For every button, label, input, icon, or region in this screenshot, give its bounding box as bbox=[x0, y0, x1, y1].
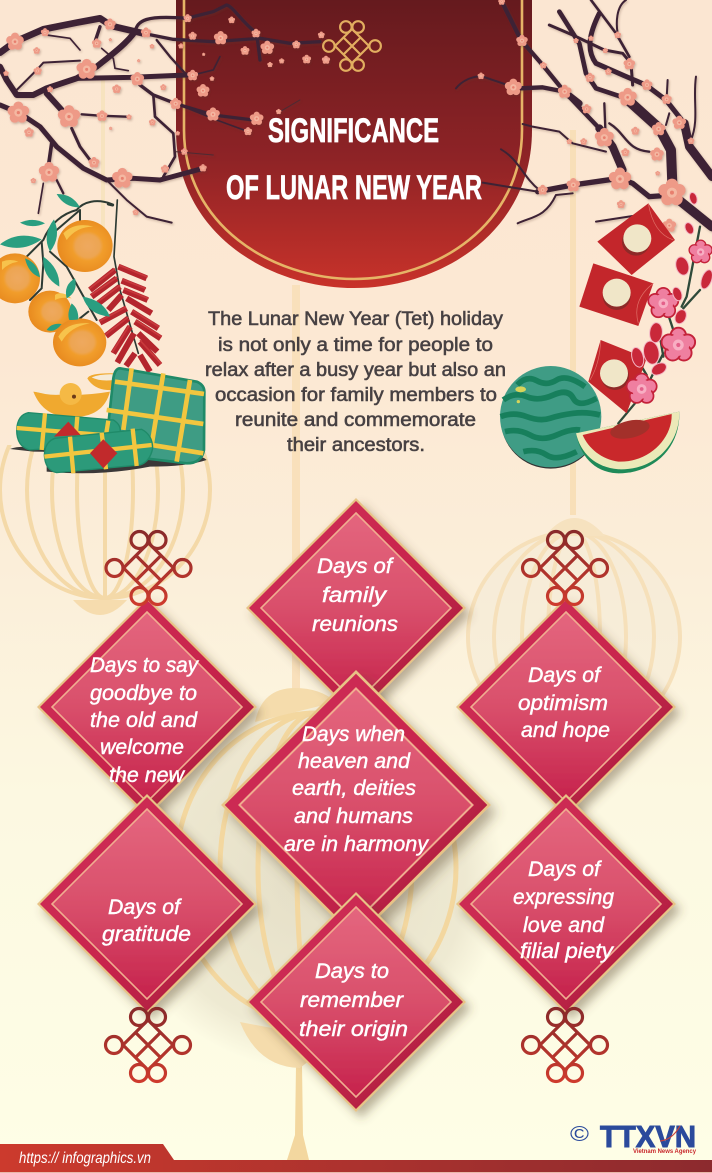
diamond: days to say goodbye: welcome bbox=[100, 735, 184, 759]
diamond: heaven, earth, deities and humans: earth, deities bbox=[292, 776, 416, 800]
diamond: heaven, earth, deities and humans: heaven and bbox=[298, 749, 411, 773]
icon: blossom buds bbox=[630, 192, 712, 378]
icon: red knots bbox=[106, 532, 608, 1082]
diamond: days of gratitude: gratitude bbox=[102, 922, 191, 946]
diamond: heaven, earth, deities and humans: Days when bbox=[302, 722, 405, 746]
diamond: days to say goodbye: the new bbox=[109, 763, 185, 787]
diamond: days to say goodbye bbox=[37, 597, 257, 817]
diamond: days of love and filial piety bbox=[456, 794, 676, 1014]
illustration: red envelopes, peach blossom and watermelon bbox=[500, 192, 712, 473]
diamond: heaven, earth, deities and humans: are in harmony bbox=[284, 832, 429, 856]
diamond: days of love and filial piety: love and bbox=[523, 913, 605, 937]
lantern: centre bbox=[115, 688, 505, 1070]
diamond: days to remember their origin: their origin bbox=[299, 1017, 408, 1041]
icon: red envelopes bbox=[579, 203, 675, 413]
diamond: days of optimism and hope: and hope bbox=[521, 718, 610, 742]
plum branch: right bbox=[456, 0, 712, 232]
icon: gold knot bbox=[323, 21, 381, 71]
diamond: days to say goodbye: Days to say bbox=[90, 653, 199, 677]
diamond: days to say goodbye: goodbye to bbox=[90, 681, 197, 705]
lantern: right bbox=[468, 518, 680, 742]
title banner bbox=[176, 0, 532, 288]
plum branch: left bbox=[0, 5, 330, 223]
intro text: occasion for family members to bbox=[215, 385, 497, 406]
diamond: days to remember their origin: Days to bbox=[315, 959, 389, 983]
intro text: is not only a time for people to bbox=[218, 335, 493, 356]
diamond: days of optimism and hope: Days of bbox=[528, 663, 602, 687]
diamond: days of optimism and hope bbox=[456, 597, 676, 817]
icon: peach blossoms bbox=[627, 240, 712, 403]
diamond: heaven, earth, deities and humans: and humans bbox=[294, 804, 413, 828]
lantern: left bbox=[0, 445, 212, 615]
icon: watermelon bbox=[500, 366, 601, 469]
diamond: days of family reunions bbox=[246, 498, 466, 718]
diamond: days of gratitude: Days of bbox=[108, 895, 182, 919]
intro text: their ancestors. bbox=[287, 435, 425, 456]
intro text bbox=[205, 309, 506, 456]
intro text: relax after a busy year but also an bbox=[205, 360, 506, 381]
icon: blossom stems bbox=[618, 227, 700, 423]
illustration: oranges, firecrackers and sticky rice cakes bbox=[0, 194, 207, 473]
diamond: days to say goodbye: the old and bbox=[90, 708, 198, 732]
diamond: days of love and filial piety: expressing bbox=[513, 885, 614, 909]
diamond: days to remember their origin bbox=[246, 892, 466, 1112]
diamond: days of gratitude bbox=[37, 794, 257, 1014]
footer bar bbox=[0, 1144, 712, 1173]
intro text: The Lunar New Year (Tet) holiday bbox=[208, 309, 504, 330]
logo: TTXVN: TTXVN bbox=[600, 1119, 696, 1154]
title bbox=[226, 112, 482, 207]
diamond: days of family reunions: Days of bbox=[317, 554, 394, 578]
diamond: days of family reunions: family bbox=[322, 583, 387, 607]
diamond: days of love and filial piety: filial piety bbox=[520, 939, 614, 963]
logo: TTXVN: Vietnam News Agency bbox=[633, 1148, 696, 1155]
icon: watermelon slice bbox=[576, 412, 679, 473]
title: SIGNIFICANCE bbox=[268, 112, 439, 150]
diamond: days to remember their origin: remember bbox=[300, 988, 404, 1012]
hanging lantern strings bbox=[101, 80, 576, 1160]
icon: ground shadow bbox=[10, 447, 207, 473]
icon: leaves bbox=[0, 194, 110, 331]
icon: square cake bbox=[107, 368, 204, 463]
diamond: days of optimism and hope: optimism bbox=[518, 691, 608, 715]
icon: gold ingots bbox=[33, 373, 115, 417]
intro text: reunite and commemorate bbox=[235, 410, 476, 431]
diamond: heaven, earth, deities and humans bbox=[221, 670, 491, 940]
icon: firecrackers bbox=[89, 265, 162, 372]
diamond: days of love and filial piety: Days of bbox=[528, 857, 602, 881]
icon: rice cake rolls bbox=[17, 413, 153, 473]
icon: orange branch bbox=[25, 200, 138, 353]
logo: TTXVN: © bbox=[570, 1123, 590, 1146]
icon: oranges bbox=[0, 220, 113, 366]
footer url: https:// infographics.vn bbox=[19, 1150, 151, 1167]
title: OF LUNAR NEW YEAR bbox=[226, 169, 482, 207]
diamond: days of family reunions: reunions bbox=[312, 612, 398, 636]
